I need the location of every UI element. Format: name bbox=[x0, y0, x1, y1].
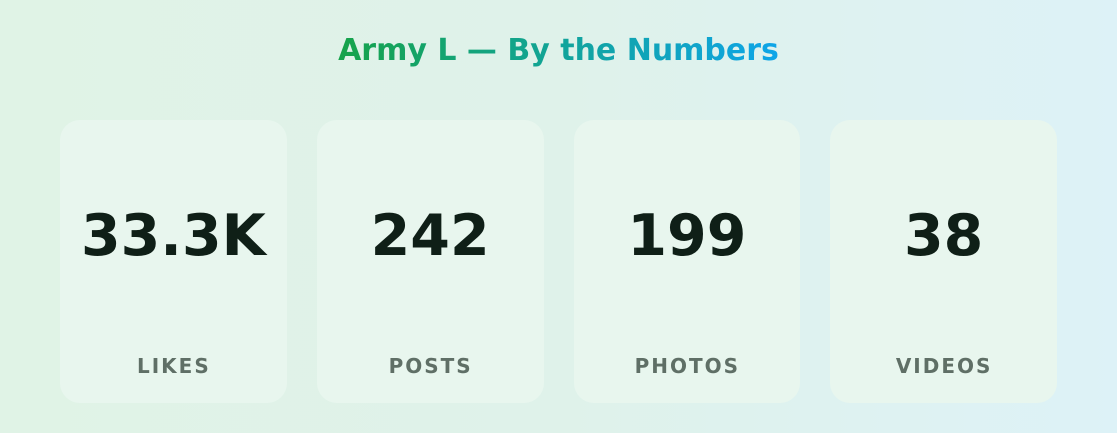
likes value: 33.3K bbox=[81, 203, 266, 269]
photos label: PHOTOS bbox=[635, 354, 740, 378]
videos value: 38 bbox=[904, 203, 983, 269]
photos value: 199 bbox=[627, 203, 746, 269]
panel: likes bbox=[60, 120, 287, 403]
likes label: LIKES bbox=[137, 354, 211, 378]
videos label: VIDEOS bbox=[896, 354, 992, 378]
posts value: 242 bbox=[371, 203, 490, 269]
panel: posts bbox=[317, 120, 544, 403]
posts label: POSTS bbox=[389, 354, 473, 378]
panel: videos bbox=[830, 120, 1057, 403]
title: Army L — By the Numbers bbox=[338, 33, 779, 68]
panel: photos bbox=[574, 120, 800, 403]
